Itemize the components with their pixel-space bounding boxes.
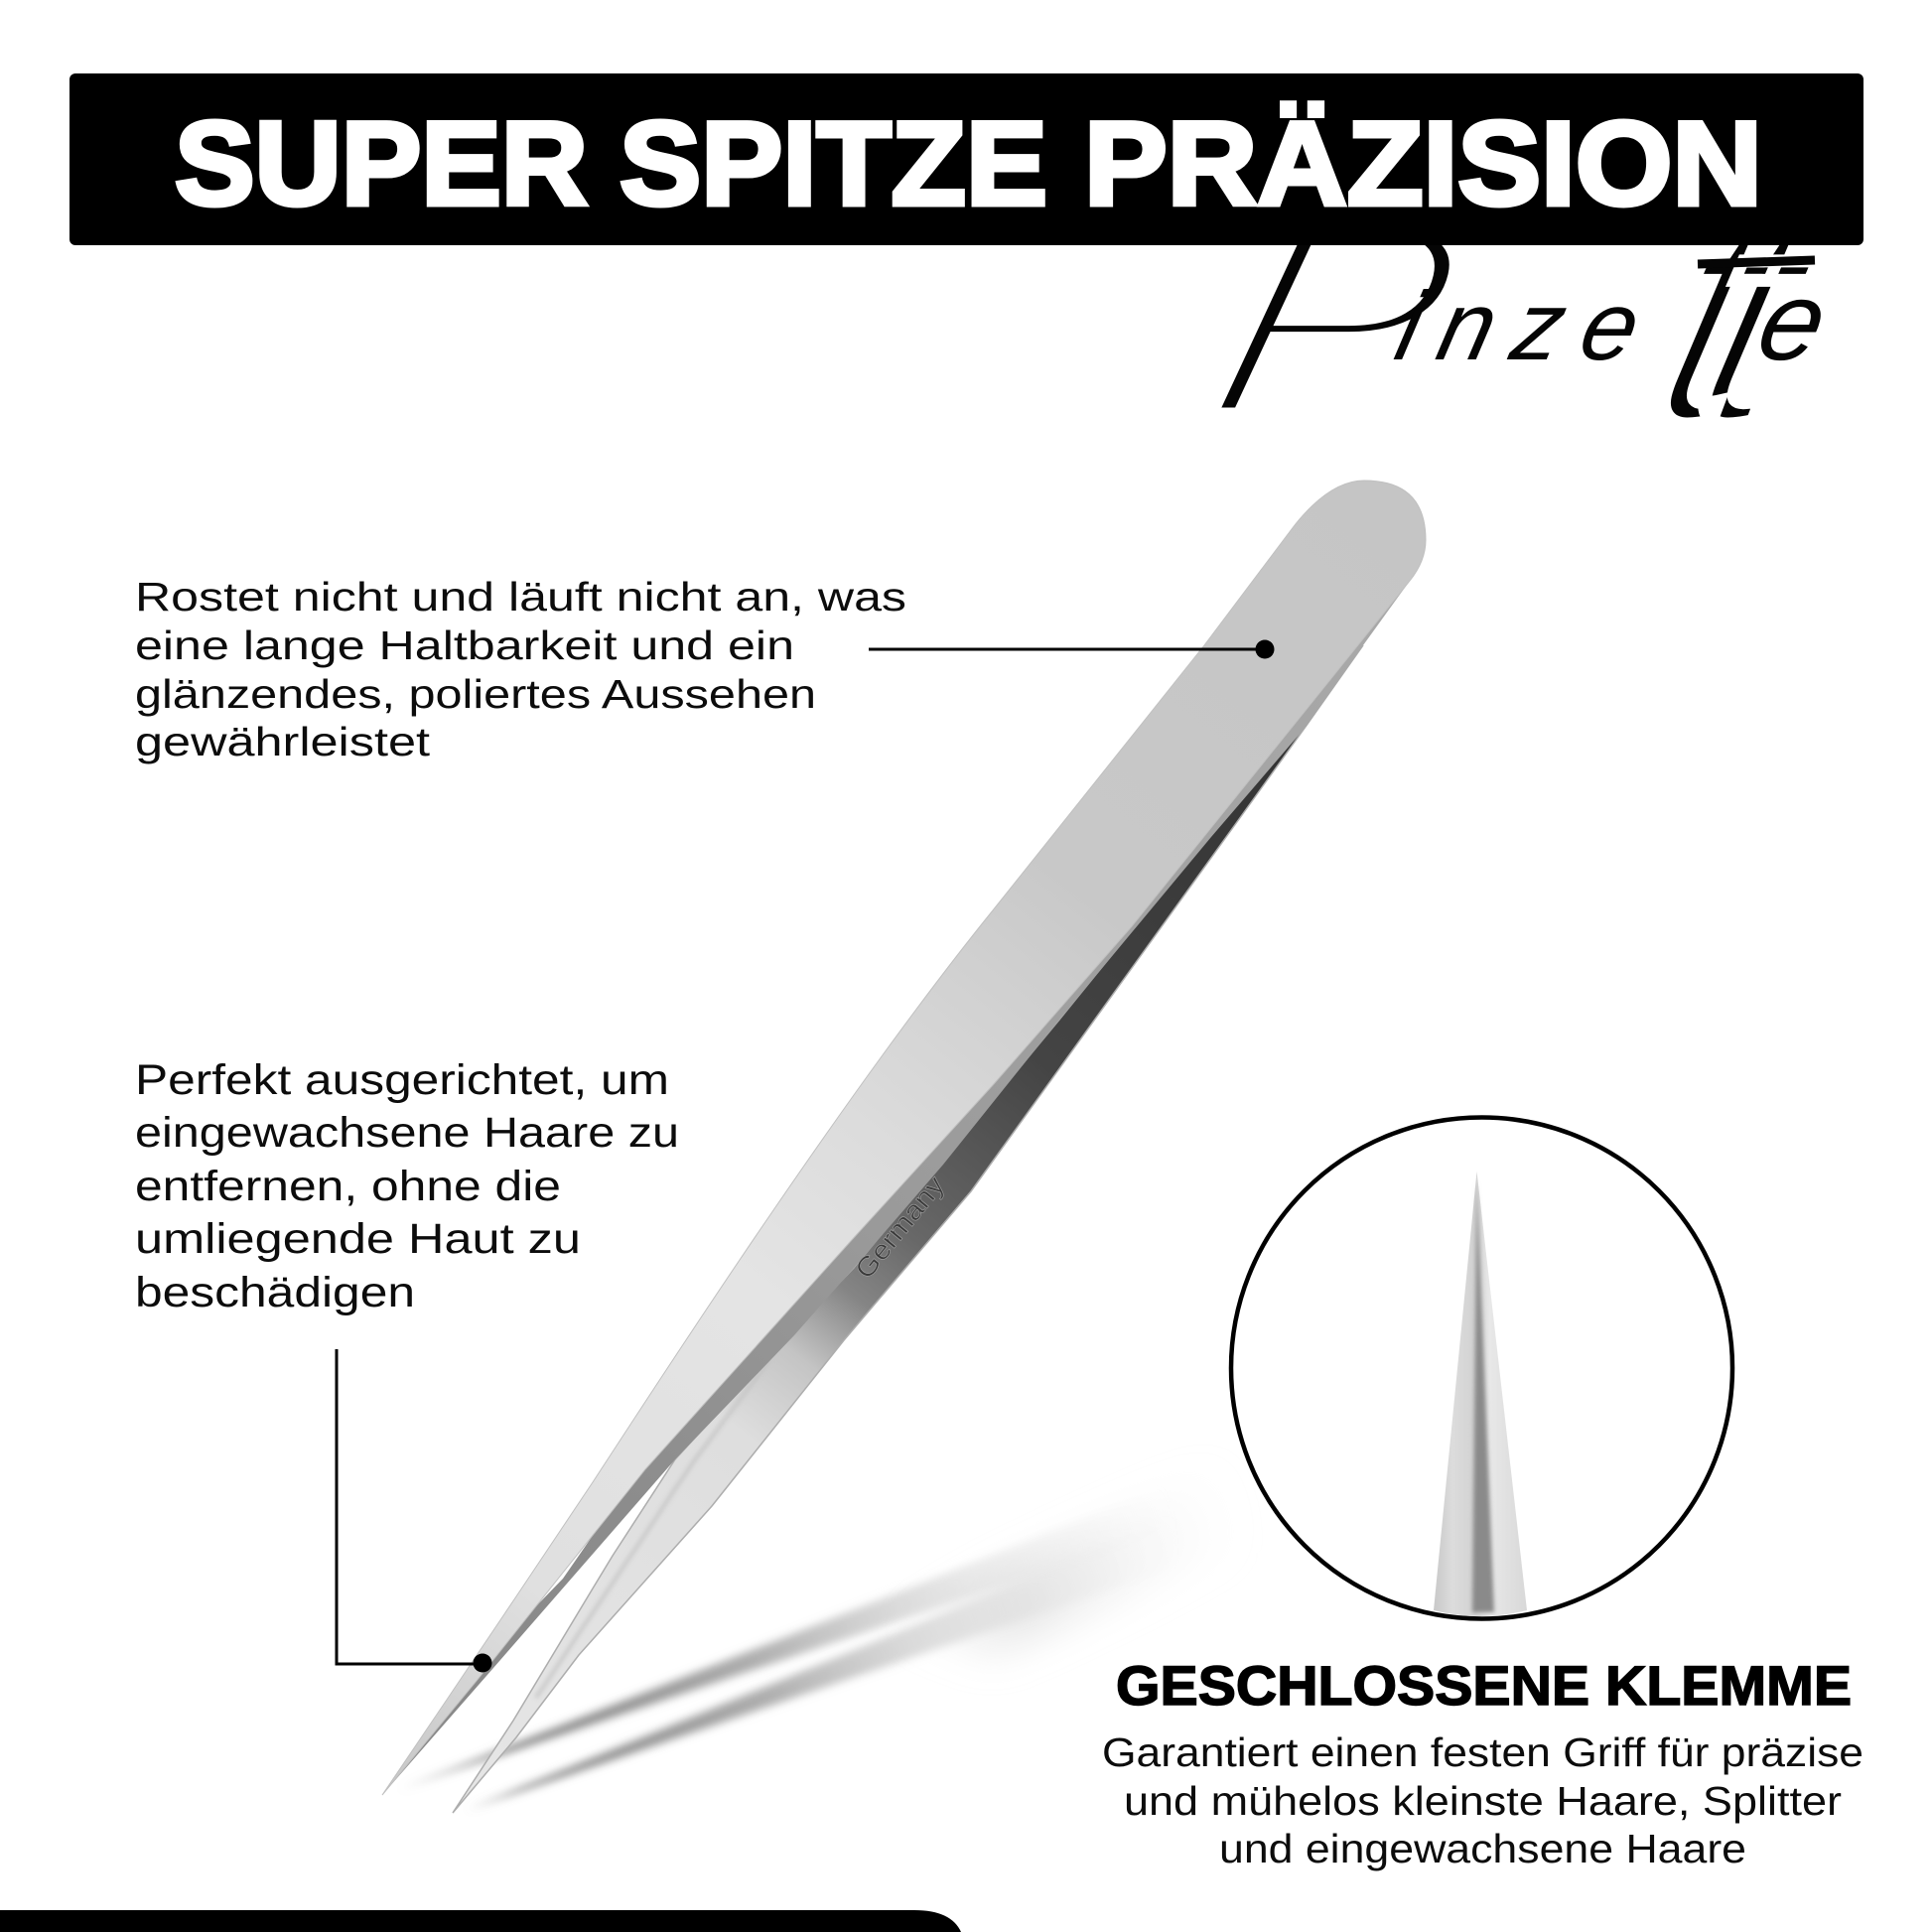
- header bar with title: [69, 73, 1863, 245]
- callout text: rust resistance: gewährleistet: [135, 719, 431, 764]
- callout line: tip: [337, 1349, 492, 1672]
- callout text: rust resistance: Rostet nicht und läuft nicht an, was: [135, 574, 906, 620]
- title: SUPER: [175, 97, 588, 230]
- description: closed clamp: und mühelos kleinste Haare, Splitter: [1124, 1778, 1842, 1824]
- blade surface streak: [536, 1360, 769, 1698]
- script word: Pinzette: tt: [1631, 148, 1844, 485]
- lower blade: [453, 645, 1363, 1813]
- callout text: alignment: [135, 1056, 679, 1316]
- engraving: Germany: Germany: [849, 1170, 951, 1285]
- description: closed clamp: Garantiert einen festen Griff für präzise: [1102, 1729, 1863, 1775]
- callout line: handle: [869, 639, 1275, 659]
- title: PRÄZISION: [1084, 97, 1762, 230]
- script word: Pinzette: [1182, 148, 1864, 485]
- script word: Pinzette: inze: [1387, 272, 1670, 381]
- script flourish: t crossbar: [1698, 260, 1815, 264]
- callout text: rust resistance: [135, 574, 906, 764]
- title: SPITZE: [620, 97, 1047, 230]
- heading: closed clamp: GESCHLOSSENE KLEMME: [1116, 1654, 1852, 1717]
- script word: Pinzette: P: [1184, 160, 1487, 476]
- callout text: alignment: eingewachsene Haare zu: [135, 1109, 679, 1157]
- callout text: alignment: Perfekt ausgerichtet, um: [135, 1056, 669, 1104]
- upper blade: [382, 481, 1426, 1795]
- script word: Pinzette: e: [1747, 259, 1839, 384]
- callout text: alignment: beschädigen: [135, 1269, 415, 1316]
- detail circle: closed tip: [1231, 1118, 1732, 1618]
- description: closed clamp: und eingewachsene Haare: [1219, 1826, 1746, 1871]
- tip close-up: [1434, 1172, 1527, 1616]
- callout text: alignment: entfernen, ohne die: [135, 1163, 561, 1210]
- inner shadow strip: [382, 581, 1410, 1795]
- bottom bar: [0, 1910, 961, 1932]
- tweezers: [382, 481, 1426, 1813]
- description: closed clamp: [1102, 1729, 1863, 1871]
- tweezers shadow: [400, 1459, 1231, 1810]
- callout text: rust resistance: glänzendes, poliertes Aussehen: [135, 671, 816, 717]
- callout text: rust resistance: eine lange Haltbarkeit und ein: [135, 622, 794, 668]
- callout text: alignment: umliegende Haut zu: [135, 1215, 581, 1263]
